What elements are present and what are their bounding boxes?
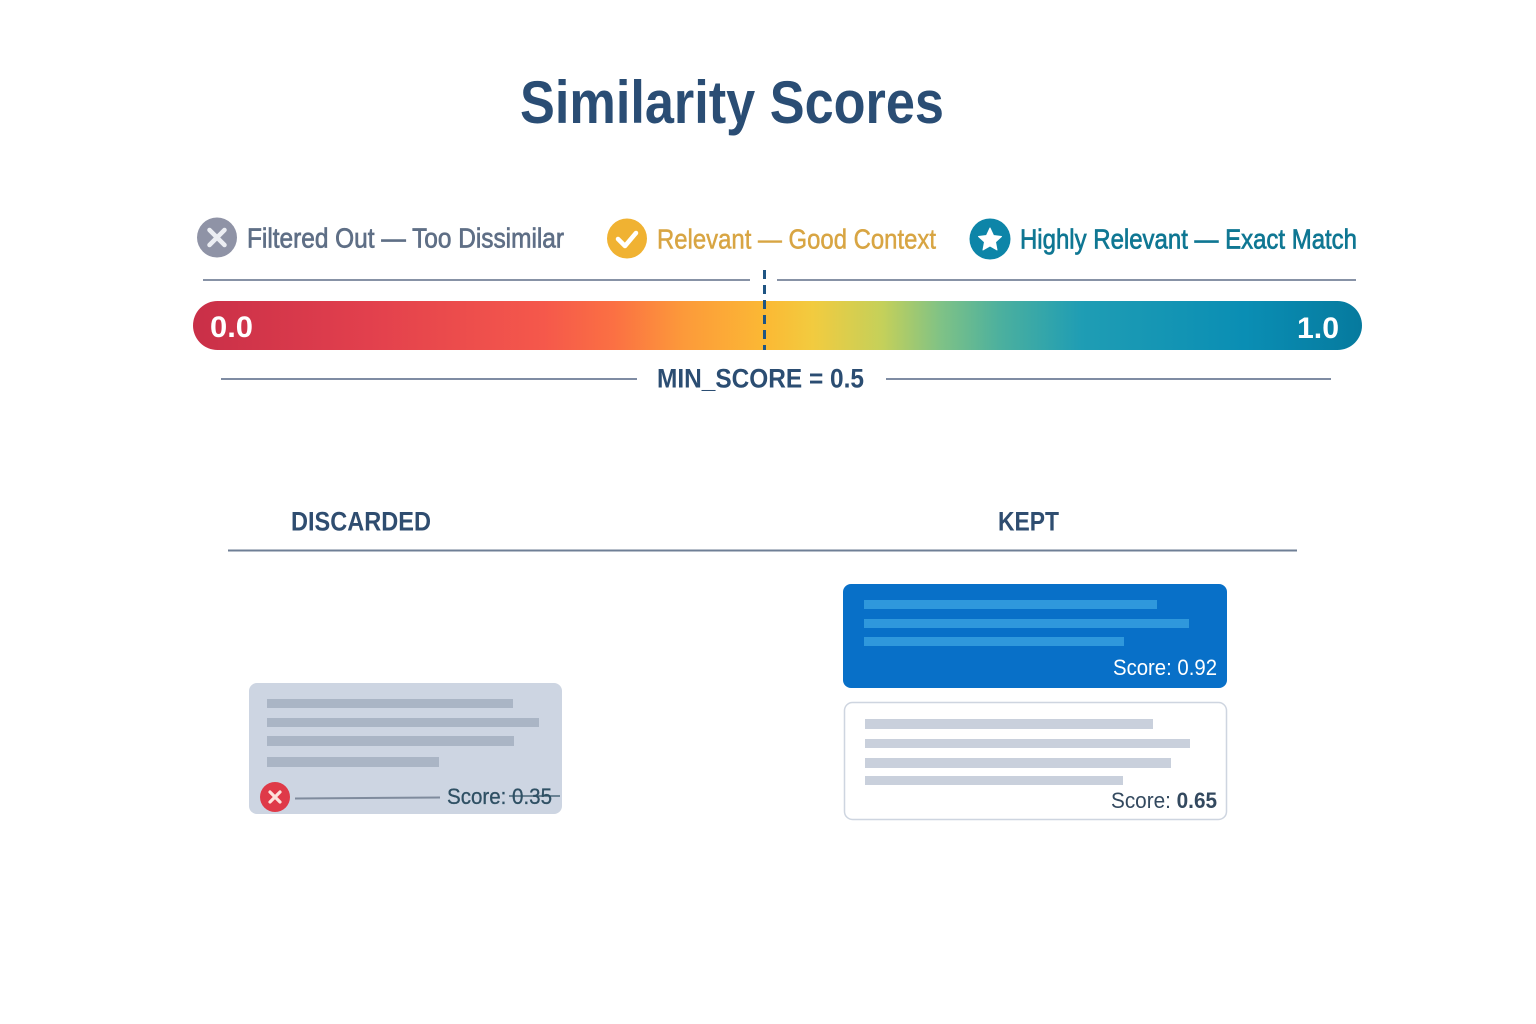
icon: grey cross xyxy=(197,218,237,258)
icon: teal star xyxy=(970,218,1010,260)
score text: Score: 0.92 xyxy=(1113,655,1217,680)
legend: highly relevant xyxy=(970,218,1357,260)
score text, struck through: Score: 0.35 xyxy=(447,784,552,809)
label: relevant: Relevant — Good Context xyxy=(657,224,936,254)
card: discarded score 0.35 xyxy=(249,683,562,814)
heading: kept: KEPT xyxy=(998,506,1059,536)
label: filtered out: Filtered Out — Too Dissimilar xyxy=(247,222,564,254)
score text: Score: 0.65 xyxy=(1111,788,1217,813)
legend: relevant xyxy=(607,218,936,258)
scale maximum: 1.0 xyxy=(1297,312,1339,345)
threshold label: MIN_SCORE = 0.5 xyxy=(657,364,864,394)
gradient score scale xyxy=(193,301,1362,350)
threshold marker xyxy=(763,270,766,350)
title: Similarity Scores xyxy=(520,69,944,136)
card: kept score 0.92 xyxy=(843,584,1227,688)
icon: red cross xyxy=(260,782,290,812)
card: kept score 0.65 xyxy=(844,702,1226,820)
label: highly relevant: Highly Relevant — Exact Match xyxy=(1020,224,1357,254)
icon: amber check xyxy=(607,218,647,258)
heading: discarded: DISCARDED xyxy=(291,506,431,536)
legend: filtered out xyxy=(197,218,564,258)
scale minimum: 0.0 xyxy=(210,311,253,344)
